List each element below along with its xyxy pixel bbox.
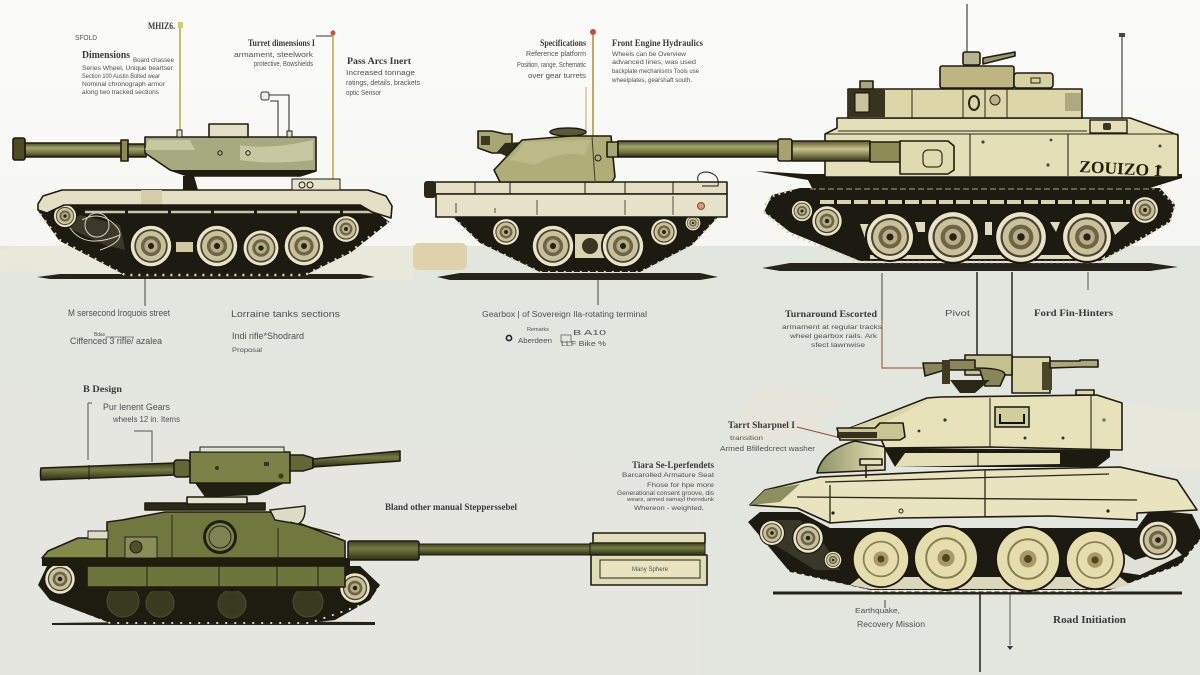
- text: tank 1 annotations: Increased tonnage: [346, 70, 415, 77]
- text: middle row captions: Remarks: [527, 327, 549, 333]
- text: tank 2 annotations: advanced lines, was used: [612, 59, 696, 66]
- text: tank 2 annotations: over gear turrets: [528, 73, 587, 80]
- ground shadow: [762, 263, 1178, 271]
- tank 2: top centre: [424, 128, 780, 280]
- text: tank 4 annotations: wheels 12 in. Items: [112, 415, 180, 424]
- text: tank 4 annotations: Tiara Se-Lperfendets: [632, 460, 714, 470]
- upper hull: [850, 395, 1122, 450]
- text: tank 4 annotations: wears, armed samayl thorndunk: [627, 497, 715, 503]
- text: tank 5 annotations: Armed Bfilledcrect washer: [720, 446, 816, 453]
- hull: [435, 182, 727, 194]
- text: tank 2 annotations: Position, range, Schematic: [517, 62, 586, 69]
- text: tank 2 annotations: Wheels can be Overview: [612, 51, 686, 58]
- text: tank 5 annotations: [720, 420, 1126, 629]
- text: tank 5 annotations: Tarrt Sharpnel I: [728, 420, 796, 430]
- lower hull: [750, 467, 1197, 523]
- text: middle row captions: LLF Bike %: [561, 341, 606, 348]
- text: middle row captions: Pivot: [945, 309, 971, 318]
- barrel: [25, 143, 122, 157]
- text: tank 4 annotations: [83, 384, 715, 513]
- text: tank 2 annotations: backplate mechanisms Tools use: [612, 68, 699, 75]
- text: middle row captions: sfect lawnwise: [811, 342, 865, 349]
- text: tank 1 annotations: Turret dimensions I: [248, 39, 315, 49]
- text: tank 1 annotations: Nominal chronograph armor: [82, 81, 166, 88]
- bracket label: Many Sphere: [632, 567, 669, 573]
- tracks: [38, 566, 380, 623]
- text: tank 1 annotations: Section 100 Austin Bolted wear: [82, 73, 161, 80]
- hull: [38, 190, 392, 218]
- ground shadow: [437, 273, 718, 280]
- dome: [817, 441, 885, 473]
- tracks: [748, 510, 1200, 590]
- text: tank 4 annotations: Pur lenent Gears: [103, 402, 170, 412]
- gun end bracket: [593, 533, 705, 543]
- turret barrel: [40, 463, 175, 480]
- text: middle row captions: armament at regular tracks: [782, 324, 883, 331]
- mid hull: [884, 448, 1110, 467]
- text: tank 1 annotations: Dimensions: [82, 50, 130, 61]
- text: tank 1 annotations: Board chassee: [133, 58, 175, 64]
- ground line: [773, 592, 1182, 594]
- text: middle row captions: Turnaround Escorted: [785, 309, 877, 319]
- text: middle row captions: Bdas: [94, 332, 105, 338]
- road wheels: [759, 520, 1178, 592]
- text: tank 4 annotations: B Design: [83, 384, 122, 394]
- text: middle row captions: Lorraine tanks sections: [231, 309, 341, 319]
- nose and hull: [42, 538, 110, 558]
- tank 5: bottom right: [748, 355, 1200, 593]
- text: tank 1 annotations: Series Wheel, Unique beartser: [82, 65, 174, 72]
- road wheels: [53, 204, 360, 268]
- text: middle row captions: B A10: [573, 330, 606, 337]
- barrel: [607, 142, 618, 157]
- text: tank 1 annotations: armament, steelwork: [234, 52, 314, 59]
- turret: [494, 136, 615, 182]
- text: tank 5 annotations: Road Initiation: [1053, 615, 1126, 626]
- tank 3: top right: [755, 52, 1182, 271]
- text: middle row captions: M sersecond Iroquois street: [68, 308, 170, 318]
- turret: [145, 503, 265, 510]
- tracks: [453, 217, 718, 272]
- text: tank 5 annotations: transition: [730, 436, 763, 442]
- main barrel: [778, 139, 792, 161]
- text: tank 2 annotations: Front Engine Hydraulics: [612, 38, 703, 48]
- text: tank 5 annotations: Recovery Mission: [857, 620, 925, 629]
- hull marking: ZOUIZO 1: [1079, 157, 1163, 180]
- text: middle row captions: Ford Fin-Hinters: [1034, 308, 1114, 318]
- text: tank 4 annotations: Whereon - weighted.: [634, 505, 704, 512]
- text: tank 4 annotations: Generational consent groove, dis: [617, 490, 715, 497]
- text: tank 4 annotations: Fhose for hpe more: [647, 483, 715, 489]
- text: tank 4 annotations: Bland other manual Stepperssebel: [385, 503, 517, 513]
- tank 1: top left: [13, 124, 392, 279]
- text: tank 2 annotations: wheelplates, gearshaft south.: [611, 77, 692, 84]
- tank 4: bottom left: [38, 447, 707, 625]
- muzzle gear: [478, 131, 512, 153]
- text: tank 1 annotations: along two tracked sections: [82, 89, 160, 96]
- ground shadow: [37, 274, 375, 279]
- roof gun: [923, 355, 1098, 395]
- text: tank 1 annotations: MHIZ6.: [148, 21, 175, 31]
- text: middle row captions: Aberdeen: [518, 338, 552, 345]
- cupola: [940, 66, 1014, 88]
- text: tank 1 annotations: protective, Bowshields: [254, 61, 313, 68]
- text: middle row captions: [68, 308, 1114, 354]
- text: middle row captions: Ciffenced 3 rifle/ azalea: [70, 336, 162, 346]
- text: tank 1 annotations: optic Sensor: [346, 90, 382, 97]
- text: middle row captions: Proposal: [232, 348, 262, 354]
- text: tank 4 annotations: Barcarolled Armature Seat: [622, 472, 714, 479]
- turret body: [848, 89, 1082, 118]
- long main gun: [348, 541, 419, 560]
- text: tank 2 annotations: Specifications: [540, 38, 586, 48]
- tracks: [764, 188, 1175, 261]
- tracks: [40, 205, 388, 274]
- text: tank 1 annotations: SFOLD: [75, 35, 97, 42]
- text: middle row captions: wheel gearbox rails. Ark: [789, 333, 878, 340]
- ground shadow: [52, 622, 375, 625]
- text: tank 5 annotations: Earthquake,: [855, 608, 900, 615]
- text: tank 1 annotations: ratings, details, brackets: [346, 80, 420, 87]
- hull: [755, 171, 1182, 188]
- text: tank 1 annotations: Pass Arcs Inert: [347, 57, 412, 67]
- text: tank 2 annotations: [517, 38, 703, 84]
- text: middle row captions: Gearbox | of Sovereign Ila-rotating terminal: [482, 310, 647, 319]
- text: middle row captions: Indi rifle*Shodrard: [232, 331, 304, 341]
- turret: [145, 137, 316, 176]
- text: tank 1 annotations: [75, 21, 420, 97]
- text: tank 2 annotations: Reference platform: [526, 51, 586, 58]
- turret neck: [183, 176, 198, 190]
